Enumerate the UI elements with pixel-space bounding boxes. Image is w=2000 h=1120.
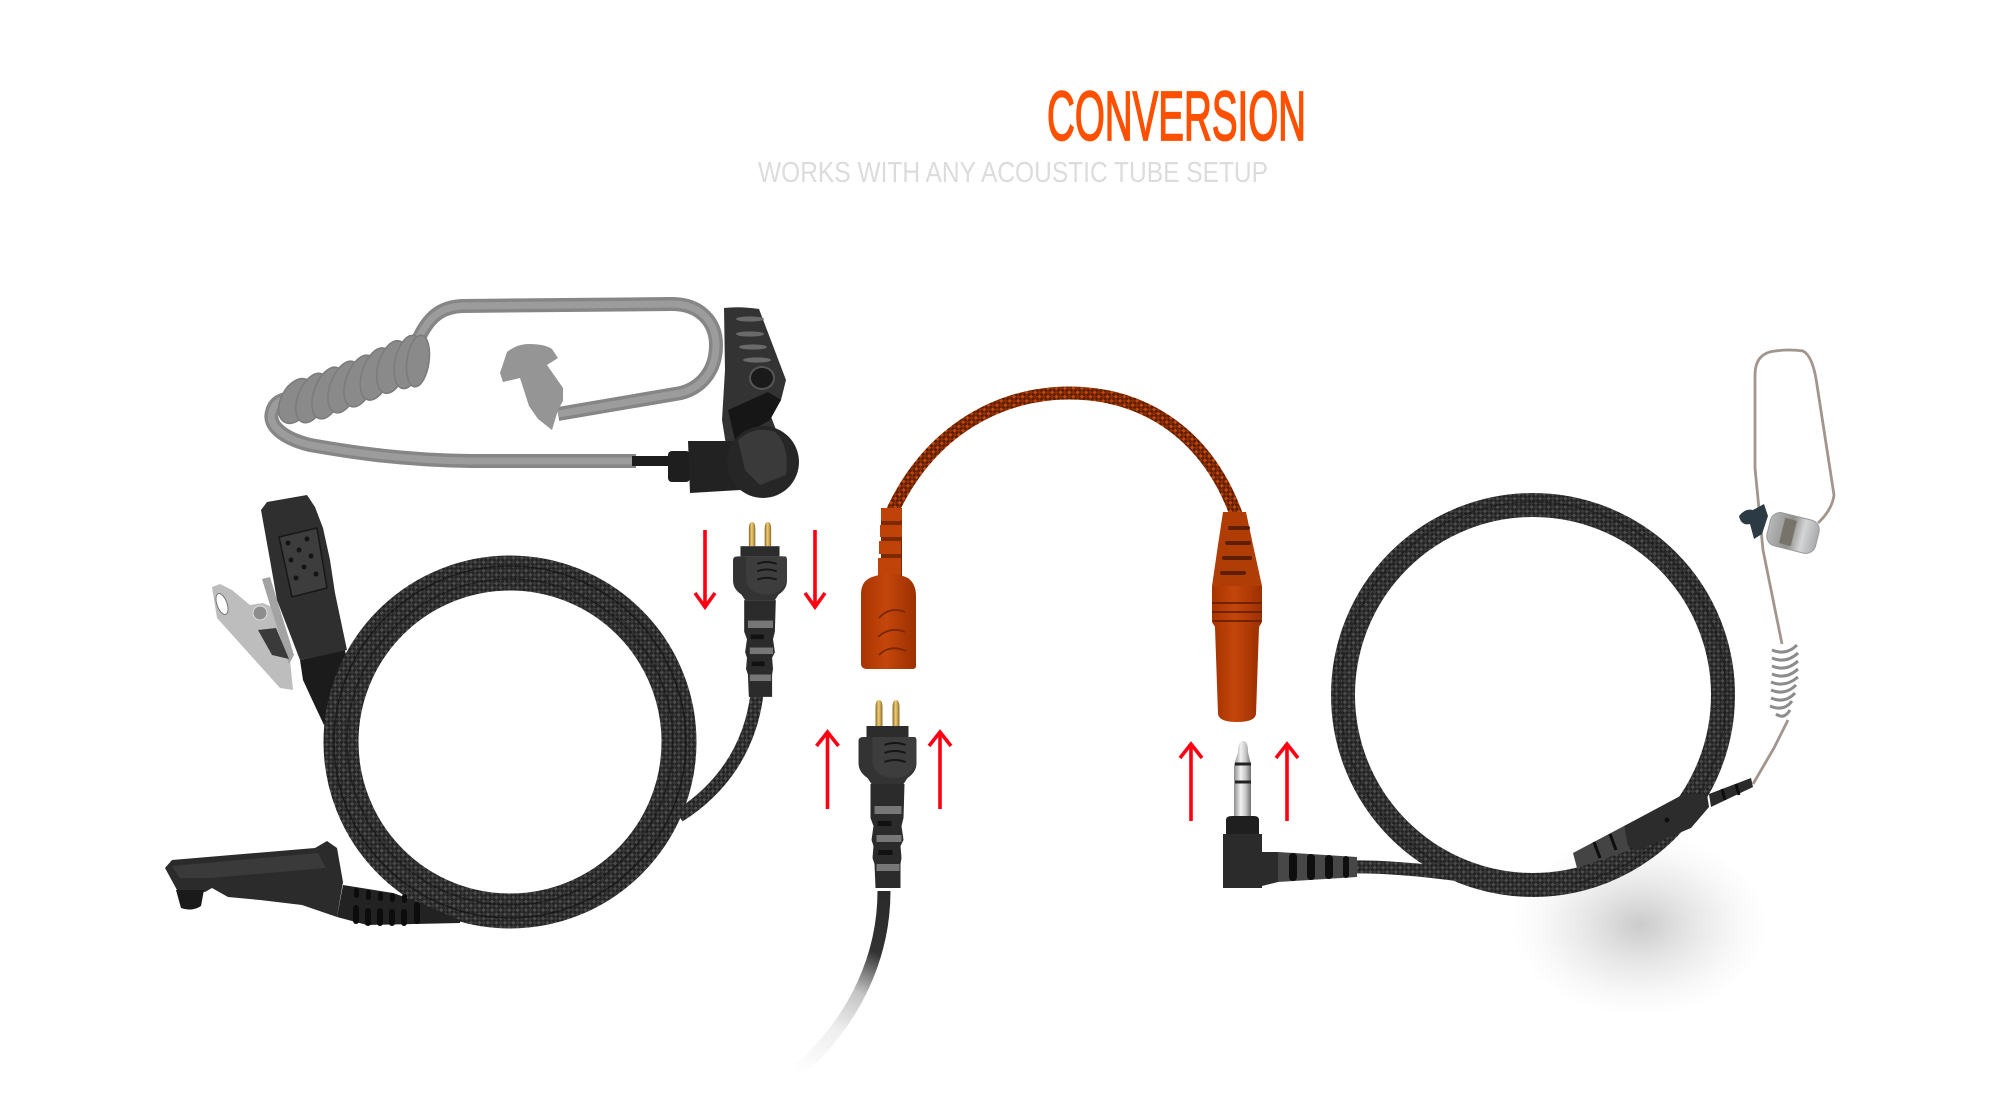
connector tier shading <box>172 853 326 878</box>
3.5mm socket barrel <box>1215 627 1259 722</box>
collar <box>1226 816 1259 834</box>
arrow down <box>695 530 715 607</box>
grey acoustic tube earpiece <box>271 304 799 498</box>
strain relief <box>300 650 348 725</box>
lower tube <box>271 398 636 461</box>
clear earbud <box>1765 510 1821 556</box>
coiled tube section <box>271 333 433 429</box>
title: CONVERSION <box>1047 77 1306 155</box>
spring coil <box>1770 645 1798 716</box>
arrow up <box>929 732 951 809</box>
left braided cable coil <box>334 566 757 918</box>
ear flange <box>1739 504 1768 539</box>
upper tube loop <box>418 304 716 414</box>
relief slots <box>1220 526 1252 575</box>
braided cable arc <box>892 393 1236 514</box>
left strain relief <box>1573 826 1630 868</box>
clip rivet <box>253 606 267 620</box>
3.5mm socket strain relief <box>1212 512 1262 586</box>
tip insulator bands <box>1235 764 1251 782</box>
3.5mm jack plug <box>1223 741 1357 888</box>
PTT button <box>279 528 327 597</box>
tube adapter and clip <box>668 307 799 498</box>
relief ridges <box>1289 853 1349 881</box>
inner strand separator <box>347 579 673 905</box>
inline microphone housing <box>1573 778 1753 868</box>
lower tube core <box>271 398 636 461</box>
plug: upper two-pin connector <box>733 522 787 697</box>
thumb screw <box>176 890 204 910</box>
two-pin socket neck <box>878 508 902 578</box>
clear acoustic tube <box>1739 350 1834 784</box>
orange adapter cable <box>861 393 1262 722</box>
ear tip <box>500 344 563 430</box>
strand separator <box>1340 502 1726 888</box>
body <box>261 495 347 660</box>
subtitle: WORKS WITH ANY ACOUSTIC TUBE SETUP <box>758 157 1268 189</box>
radio connector <box>165 841 460 926</box>
socket grooves <box>878 610 906 655</box>
clip lever <box>262 577 294 664</box>
two-pin socket head <box>861 574 916 669</box>
body <box>1223 834 1278 888</box>
mic body <box>1624 794 1709 851</box>
coil ring <box>1343 505 1723 885</box>
PTT microphone with clip <box>212 495 348 725</box>
red arrows <box>695 530 1298 821</box>
fading cable below lower plug <box>790 891 884 1078</box>
earbud core <box>1779 518 1797 546</box>
right strain relief <box>1709 778 1753 807</box>
relief ridges <box>1594 784 1739 858</box>
arrow down <box>805 530 825 607</box>
3.5mm socket rings <box>1212 586 1262 627</box>
cable lead to plug <box>679 694 757 816</box>
arrow up <box>816 732 838 809</box>
plug: lower two-pin connector <box>858 700 916 888</box>
strain relief <box>1278 852 1357 882</box>
coil ring <box>341 573 679 911</box>
lead to jack plug <box>1350 845 1620 886</box>
connector body <box>165 841 343 917</box>
strand separators <box>334 566 686 918</box>
tube tip <box>632 456 668 466</box>
metal tip <box>1234 741 1251 818</box>
arrow up <box>1180 744 1202 821</box>
right braided cable coil <box>1340 502 1726 888</box>
metal clip <box>212 584 293 690</box>
clip spring <box>258 628 289 659</box>
thin tube <box>1753 350 1834 784</box>
shadow under right cable <box>1512 833 1768 1017</box>
button dots <box>286 536 318 580</box>
mic port <box>1664 818 1670 822</box>
strain relief <box>337 885 460 925</box>
grip ridges <box>353 888 420 926</box>
upper tube core <box>418 304 716 414</box>
arrow up <box>1276 744 1298 821</box>
clip hole <box>214 592 230 616</box>
